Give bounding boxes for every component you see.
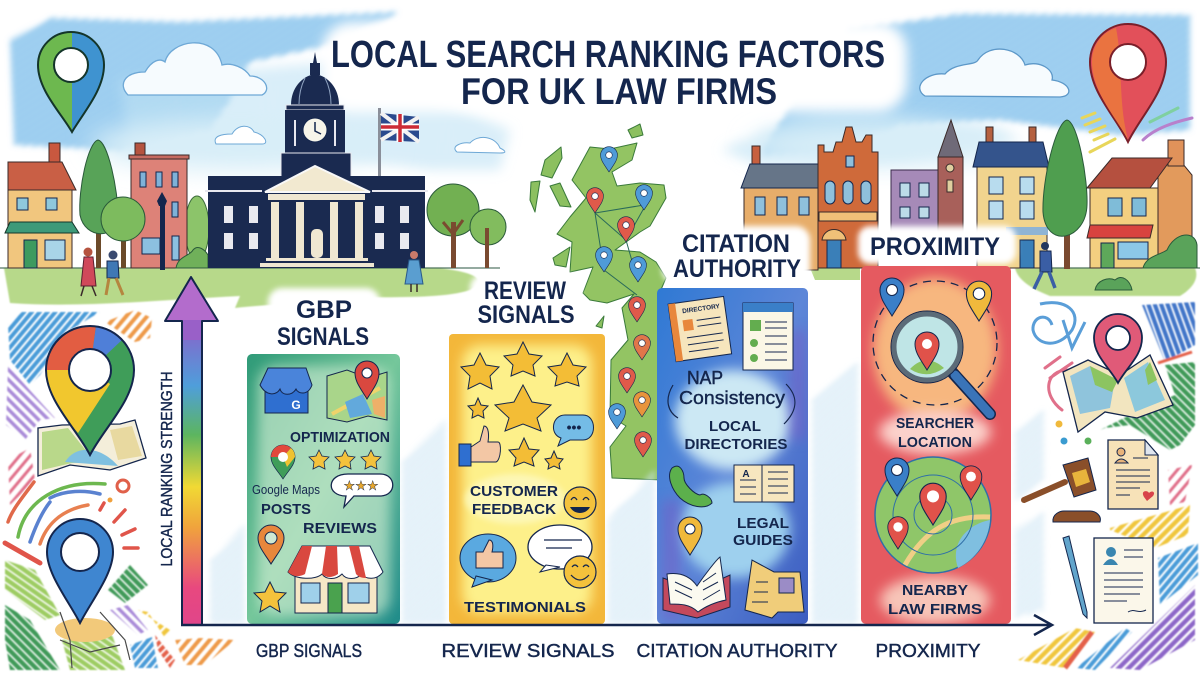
lower hatched background (210, 360, 1044, 624)
label: local directories: LOCAL (709, 418, 761, 435)
right side scribbles (1018, 302, 1198, 670)
icon: pen (1063, 536, 1087, 618)
church spire (938, 120, 963, 235)
label: Google Maps: Google Maps (252, 483, 320, 497)
label: legal guides: GUIDES (733, 532, 793, 549)
review speech bubble: ★★★ (344, 478, 378, 493)
heading: citation authority: AUTHORITY (673, 255, 801, 283)
label: customer feedback: CUSTOMER (470, 483, 558, 500)
mainland (557, 143, 666, 480)
label: nearby law firms (888, 582, 982, 618)
windows (224, 206, 409, 249)
icon: gavel (1024, 458, 1100, 522)
icon: smile emoji (564, 556, 596, 588)
cycle arrows (668, 384, 795, 424)
house: tan grey roof (741, 146, 818, 270)
proximity radius map (875, 457, 991, 573)
icon: blue pin (880, 278, 904, 316)
icon: directory book: DIRECTORY (682, 303, 721, 315)
dots (1056, 420, 1092, 444)
map pins (885, 458, 982, 549)
title: FOR UK LAW FIRMS (461, 71, 777, 112)
label: posts: POSTS (261, 501, 311, 518)
heading: GBP signals (268, 288, 380, 351)
house: stepped-gable brick (818, 127, 878, 268)
clouds (123, 43, 1069, 153)
heading: review signals: SIGNALS (478, 301, 574, 329)
UK flag (378, 108, 419, 176)
bushes (1095, 235, 1197, 290)
left townscape (5, 140, 209, 296)
icon: web listing page (743, 303, 793, 370)
label: nearby law firms: LAW FIRMS (888, 601, 982, 618)
icon: Google business profile store (260, 368, 312, 413)
panel: review signals (449, 334, 605, 624)
icon: small red pin (1094, 314, 1142, 383)
panel card (247, 354, 400, 624)
house: mauve (891, 170, 938, 236)
child figure (405, 251, 423, 292)
label: customer feedback (465, 474, 565, 524)
label: local directories (684, 418, 788, 453)
icon: Google Maps pin (271, 445, 295, 479)
heading: review signals: REVIEW (484, 277, 566, 305)
icon: gold star (254, 582, 286, 612)
title halo (322, 22, 907, 112)
right townscape (741, 120, 1197, 290)
label: testimonials: TESTIMONIALS (464, 599, 586, 616)
heading: GBP signals: SIGNALS (277, 323, 369, 351)
label: NAP consistency (679, 368, 785, 408)
blue hatch (8, 312, 100, 385)
wings (208, 176, 425, 268)
icon: blue thumb bubble (460, 534, 516, 587)
icon: yellow pin (966, 281, 992, 321)
orange patch under pin (55, 618, 115, 642)
purple strokes (6, 366, 55, 440)
icon: white speech bubble (528, 525, 592, 572)
pink arcs (1045, 357, 1072, 410)
corner pin: top left (38, 32, 104, 132)
corner pin: top right (1090, 24, 1166, 142)
label: NAP consistency: NAP (687, 368, 723, 388)
round tree (101, 197, 145, 268)
icon: blue pin (47, 519, 113, 623)
network lines (595, 205, 644, 295)
x axis labels: CITATION AUTHORITY (636, 641, 838, 661)
people (81, 248, 123, 296)
icon: map with red pin (327, 361, 387, 422)
left side scribbles (5, 310, 235, 670)
x axis labels: GBP SIGNALS (256, 641, 362, 661)
grass band (0, 268, 1200, 308)
pediment (265, 166, 370, 192)
green hatches (5, 560, 60, 620)
UK map (530, 124, 666, 480)
pink strokes (8, 448, 35, 505)
heading: citation authority (662, 226, 810, 284)
x axis labels: PROXIMITY (876, 641, 980, 661)
islands (530, 124, 643, 328)
tall tree (80, 140, 118, 268)
vertical axis arrow (165, 277, 218, 625)
panel: proximity (861, 266, 1011, 624)
street lamp (157, 192, 167, 270)
horizontal axis arrow (181, 615, 1052, 635)
orange strokes (105, 310, 152, 342)
x axis labels (256, 641, 980, 661)
heading: proximity: PROXIMITY (870, 233, 1000, 261)
title: LOCAL SEARCH RANKING FACTORS (331, 34, 885, 76)
label: optimization: OPTIMIZATION (290, 429, 390, 446)
title (331, 34, 885, 112)
label: searcher location: LOCATION (898, 434, 972, 451)
y axis label: LOCAL RANKING STRENGTH (159, 372, 176, 566)
icon: open book: A (742, 469, 750, 480)
courthouse (205, 52, 428, 268)
dashed search radius (873, 281, 997, 405)
panel card (657, 288, 808, 624)
label: reviews: REVIEWS (303, 520, 377, 537)
sky watercolor (10, 12, 1190, 171)
trees right of courthouse (427, 184, 506, 268)
columns (260, 194, 374, 267)
house: yellow shop (5, 143, 79, 268)
label: searcher location: SEARCHER (896, 415, 974, 432)
icon: chat bubble (553, 415, 594, 446)
panel card (861, 266, 1011, 624)
tree (1043, 120, 1087, 269)
heading: review signals (470, 274, 580, 330)
icon: thumbs up (459, 426, 500, 466)
label: legal guides: LEGAL (737, 515, 789, 532)
label: local directories: DIRECTORIES (684, 436, 788, 453)
icon: legal document (1108, 440, 1158, 509)
sky scribbles near pin (1082, 108, 1192, 152)
icon: storefront (288, 546, 383, 613)
icon: blue swirl (1033, 303, 1085, 348)
icon: folded map left (38, 420, 146, 476)
icon: laughing emoji (564, 487, 596, 519)
icon: chat bubble: ••• (567, 419, 581, 435)
label: legal guides (733, 515, 793, 549)
icon: directory book (668, 296, 732, 362)
icon: open book left (663, 557, 730, 618)
icon: Google business profile store: G (291, 398, 301, 412)
house: red roof (1087, 140, 1192, 268)
label: NAP consistency: Consistency (679, 388, 785, 408)
x axis labels: REVIEW SIGNALS (442, 641, 614, 661)
rainbow arcs (5, 482, 138, 563)
icon: phone (670, 466, 712, 507)
panel card (449, 334, 605, 624)
icon: yellow pin (678, 517, 702, 555)
icon: Google-coloured pin (46, 326, 134, 455)
stars row (309, 450, 381, 469)
panel: GBP signals (247, 354, 400, 624)
purple yellow blue red patches (110, 605, 148, 635)
icon: magnifying glass (891, 311, 990, 414)
icon: open book (734, 465, 794, 502)
label: customer feedback: FEEDBACK (472, 501, 556, 518)
dome and clock tower (281, 52, 351, 179)
label: nearby law firms: NEARBY (902, 582, 968, 599)
heading: proximity (858, 226, 1016, 264)
pink building (129, 143, 189, 268)
house: cream navy roof (973, 127, 1049, 268)
icon: folded map right (1063, 355, 1173, 432)
review speech bubble (331, 474, 393, 507)
person walking (1034, 242, 1055, 289)
panel: citation authority (657, 288, 808, 624)
label: searcher location (896, 415, 974, 451)
icon: orange pin (258, 525, 284, 564)
icon: open book right (745, 560, 804, 618)
heading: GBP signals: GBP (296, 296, 352, 324)
bushes (176, 247, 208, 268)
tree behind (185, 196, 209, 266)
icon: signed document (1094, 538, 1153, 623)
map pins (587, 147, 652, 457)
stars (461, 342, 586, 469)
heading: citation authority: CITATION (682, 230, 790, 258)
